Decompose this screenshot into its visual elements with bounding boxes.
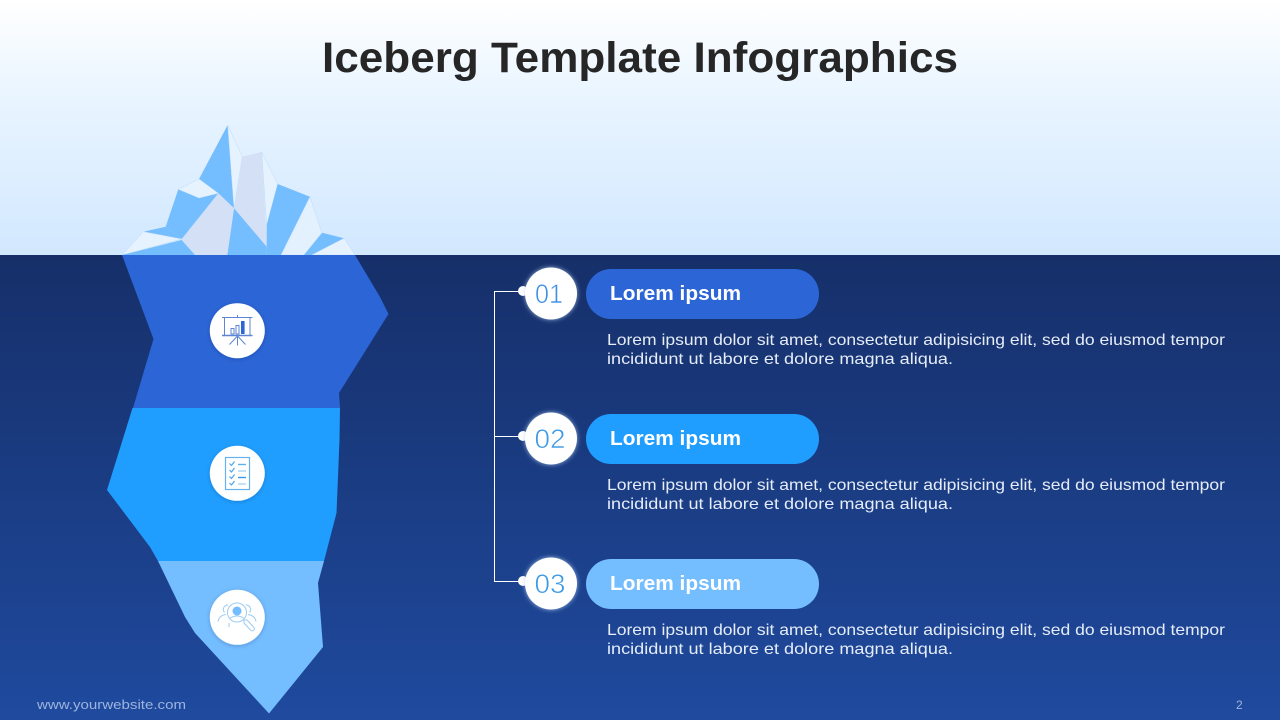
sea background [0, 255, 1280, 720]
text 02: incididunt ut labore et dolore magna aliqua. [607, 496, 953, 513]
sky background [0, 0, 1280, 255]
iceberg band 2 [107, 408, 340, 561]
iceberg band 3 [158, 561, 324, 714]
pill 02 [586, 414, 819, 464]
icon: people search [210, 590, 265, 645]
number badge 03 [518, 558, 577, 610]
item 02 [518, 412, 1226, 513]
icon: checklist [210, 446, 265, 501]
number badge 01: 01 [535, 279, 563, 309]
pill 03: Lorem ipsum [610, 572, 741, 595]
text 03: Lorem ipsum dolor sit amet, consectetur adipisicing elit, sed do eiusmod tempor [607, 622, 1226, 639]
iceberg band 1 [122, 255, 388, 408]
footer website: www.yourwebsite.com [36, 697, 186, 712]
page number: 2 [1236, 698, 1243, 712]
text 02: Lorem ipsum dolor sit amet, consectetur adipisicing elit, sed do eiusmod tempor [607, 477, 1226, 494]
pill 03 [586, 559, 819, 609]
number badge 02: 02 [534, 424, 566, 454]
number badge 03: 03 [534, 569, 566, 599]
text 03: incididunt ut labore et dolore magna aliqua. [607, 641, 953, 658]
text 02 [607, 477, 1226, 513]
text 01 [607, 332, 1226, 368]
text 03 [607, 622, 1226, 658]
iceberg tip [122, 125, 355, 255]
title: Iceberg Template Infographics [322, 34, 958, 82]
text 01: incididunt ut labore et dolore magna aliqua. [607, 351, 953, 368]
item 01 [518, 268, 1226, 368]
pill 01: Lorem ipsum [610, 282, 741, 305]
icon: presentation board [210, 303, 265, 358]
connector lines [494, 292, 522, 582]
pill 01 [586, 269, 819, 319]
number badge 02 [518, 412, 577, 464]
text 01: Lorem ipsum dolor sit amet, consectetur adipisicing elit, sed do eiusmod tempor [607, 332, 1226, 349]
item 03 [518, 558, 1226, 658]
number badge 01 [518, 268, 577, 320]
pill 02: Lorem ipsum [610, 427, 741, 450]
